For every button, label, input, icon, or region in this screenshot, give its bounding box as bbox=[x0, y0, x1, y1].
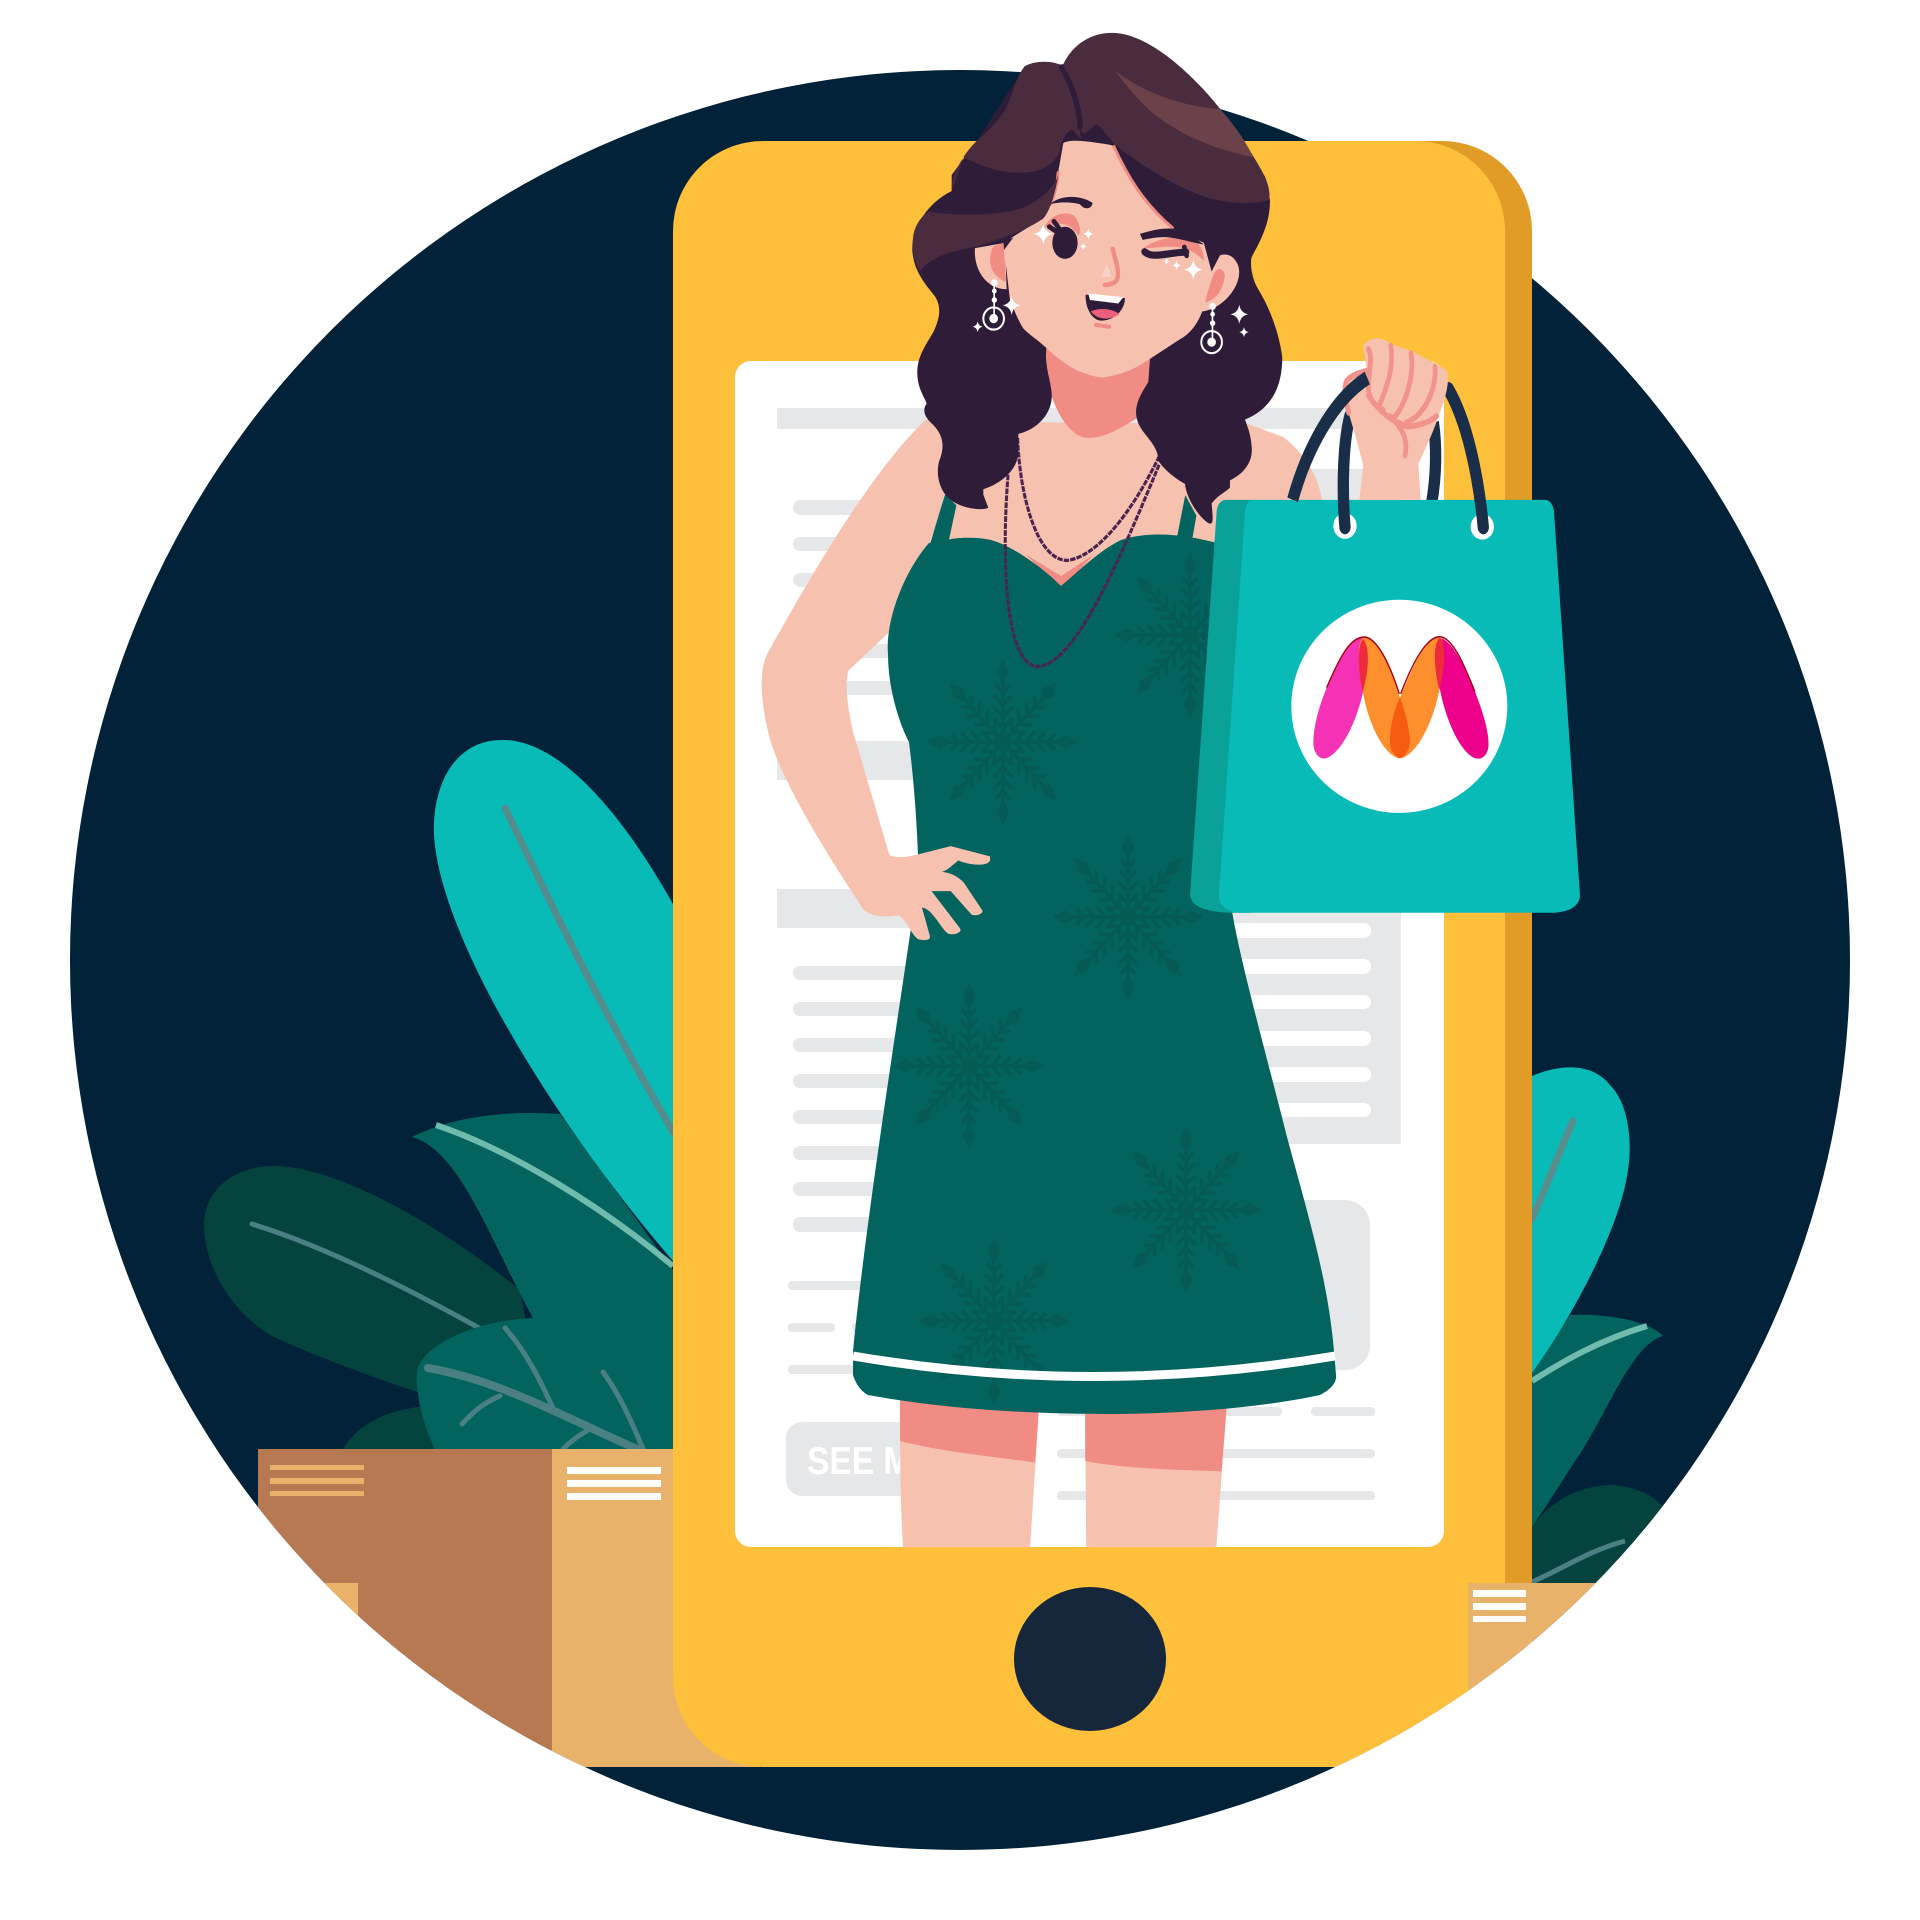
screen: white lines on grey panel bbox=[1234, 923, 1371, 1117]
hair: near ear strand bbox=[1003, 237, 1220, 271]
leaf vein: light highlight bbox=[436, 1125, 673, 1266]
girl figure bbox=[762, 33, 1336, 1547]
bag: main front bbox=[1219, 500, 1580, 913]
phone screen bbox=[735, 361, 1444, 1547]
raised hand gripping handles bbox=[1343, 338, 1448, 500]
box label lines: white bbox=[567, 1467, 661, 1500]
bag logo bbox=[1291, 600, 1507, 813]
phone: dark side edge bbox=[1335, 141, 1532, 1767]
right box corner bbox=[1468, 1583, 1596, 1691]
phone: yellow front bbox=[673, 141, 1505, 1767]
screen: see more button bbox=[786, 1422, 901, 1496]
phone home button bbox=[1014, 1587, 1166, 1731]
leaf: large teal bbox=[434, 740, 673, 1261]
box: tan side bbox=[552, 1449, 760, 1767]
box: right tan bbox=[1468, 1583, 1596, 1691]
face: hairline shading bbox=[1050, 145, 1173, 229]
left eye bbox=[1044, 197, 1093, 259]
right plant leaves bbox=[1532, 1067, 1665, 1583]
dress bbox=[853, 534, 1336, 1414]
left plant leaves bbox=[204, 740, 673, 1450]
shopping bag with handles and hand bbox=[1190, 338, 1580, 913]
box: small tan box corner bbox=[324, 1583, 358, 1616]
nose bbox=[1102, 249, 1118, 285]
right winking eye bbox=[1140, 228, 1204, 261]
leaf: right mid green bbox=[1532, 1315, 1663, 1527]
leaf: small dark behind box bbox=[343, 1407, 435, 1449]
bag handle: outer left over thumb bbox=[1293, 378, 1367, 500]
box label lines: tan bbox=[270, 1465, 364, 1496]
bag eyelets bbox=[1333, 513, 1494, 540]
mouth bbox=[1086, 294, 1125, 327]
screen: see more button: SEE MORE bbox=[807, 1440, 984, 1483]
leaf: mid green left bbox=[412, 1113, 673, 1320]
phone bbox=[673, 141, 1532, 1767]
box: brown side bbox=[258, 1449, 552, 1779]
hair: bangs tips bbox=[1058, 129, 1113, 152]
earring right bbox=[1201, 303, 1249, 353]
hair: top left light bbox=[952, 62, 1081, 191]
dress straps bbox=[929, 494, 1196, 548]
bag: shaded side bbox=[1190, 500, 1257, 913]
hair: top right light bbox=[1063, 33, 1270, 203]
head and hair bbox=[912, 33, 1282, 524]
skin: torso and shoulders bbox=[930, 348, 1322, 601]
bag handles: front bbox=[1343, 389, 1483, 527]
leaf: front green with veins bbox=[417, 1318, 673, 1449]
dress hem stripe bbox=[853, 1356, 1335, 1376]
earring left bbox=[973, 279, 1021, 332]
legs bbox=[900, 1391, 1227, 1547]
cardboard box left bbox=[258, 1449, 760, 1779]
necklaces bbox=[1005, 438, 1159, 667]
ears bbox=[975, 243, 1239, 311]
leaf: darkest left bbox=[204, 1166, 540, 1400]
hair: highlight bbox=[1115, 70, 1253, 157]
screen content placeholder blocks bbox=[777, 408, 1407, 1500]
bag handles: back bbox=[1432, 422, 1436, 503]
dress snowflake pattern bbox=[893, 552, 1266, 1404]
face sparkles bbox=[1033, 223, 1203, 280]
face bbox=[1003, 141, 1212, 378]
hand on hip over dress bbox=[861, 846, 990, 940]
left arm with hand on hip bbox=[762, 420, 990, 940]
hair: dark back bbox=[912, 33, 1282, 524]
hair: left wave band bbox=[913, 175, 1058, 271]
ears: inner shading bbox=[990, 243, 1225, 303]
hair: parting line bbox=[1062, 68, 1080, 127]
leaf: right darkest bbox=[1532, 1485, 1665, 1583]
leaf: right teal bbox=[1532, 1067, 1630, 1373]
box right label lines bbox=[1473, 1590, 1526, 1622]
